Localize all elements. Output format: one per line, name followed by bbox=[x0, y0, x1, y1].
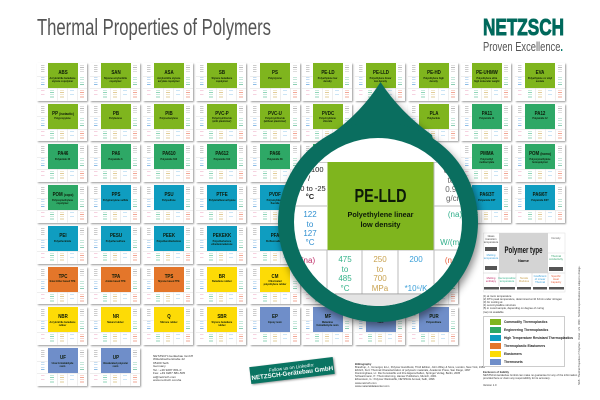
card: UF: Urea formaldehyde resin bbox=[52, 362, 73, 368]
card: PA610: PA610 bbox=[162, 151, 175, 157]
card: CM bbox=[250, 266, 300, 304]
card: PA66: Polyamide 66 bbox=[267, 158, 283, 161]
polymer type template card: Specific bbox=[551, 274, 561, 278]
magnified card: PE-LLD: (na) bbox=[445, 256, 459, 265]
magnified card: PE-LLD: 250 bbox=[373, 255, 387, 264]
card: PA6/6T: PA6/6T bbox=[533, 192, 547, 198]
polymer type template card: temperature bbox=[500, 279, 515, 283]
footnotes: (3) for cooling at bbox=[483, 301, 502, 304]
magnified card: PE-LLD: 0.94 bbox=[445, 185, 461, 194]
polymer type template card: conductivity bbox=[549, 257, 564, 261]
magnified card: PE-LLD: / bbox=[308, 174, 311, 183]
card: PUR bbox=[408, 307, 458, 345]
card: PA12: PA12 bbox=[535, 110, 545, 116]
polymer type template card: Melting bbox=[487, 276, 496, 280]
card: PP bbox=[37, 104, 87, 141]
card: TPC bbox=[37, 266, 87, 304]
card: ASA: ASA bbox=[164, 70, 173, 76]
card: UP: UP bbox=[112, 355, 119, 361]
card: UP bbox=[90, 348, 140, 386]
card: PE-LD: Polyethylene low density bbox=[318, 77, 337, 83]
contact address: Germany bbox=[153, 364, 166, 368]
card: PVC-U bbox=[250, 104, 300, 141]
card: NBR: Acrylonitrile butadiene rubber bbox=[50, 321, 75, 327]
card: TPA: TPA bbox=[111, 274, 120, 280]
card: SBR: SBR bbox=[217, 314, 227, 320]
magnifier ring with pointer bbox=[278, 82, 478, 322]
legend: elastomers: Elastomers bbox=[504, 352, 522, 356]
card: EP: EP bbox=[272, 314, 278, 320]
magnified card: PE-LLD: to bbox=[342, 265, 349, 274]
card: PVDC bbox=[302, 104, 352, 141]
LinkedIn badge: NETZSCH-Gerätebau GmbH bbox=[251, 364, 334, 381]
card: PVDC: PVDC bbox=[321, 110, 334, 116]
magnified card: PE-LLD: *10⁶/K bbox=[405, 284, 428, 293]
card: PF bbox=[355, 307, 405, 345]
card: Q bbox=[143, 307, 193, 345]
card: SB: Styrene butadiene copolymer bbox=[212, 77, 232, 83]
footnotes: (1) at room temperature bbox=[483, 294, 511, 298]
card: SAN: Styrene acrylonitrile copolymer bbox=[104, 77, 127, 83]
card: CM: CM bbox=[272, 274, 278, 280]
card: PLA: Polylactide bbox=[427, 117, 440, 120]
card: PA12: Polyamide 12 bbox=[532, 117, 548, 120]
card: PMMA bbox=[461, 144, 511, 182]
card: PIB: Polyisobutylene bbox=[160, 117, 178, 120]
card: PEI bbox=[37, 226, 87, 264]
card: PA6/3T bbox=[461, 185, 511, 222]
card: PS bbox=[250, 63, 300, 100]
card: EP: Epoxy resin bbox=[268, 321, 282, 324]
footnotes: (4) semicrystalline structure bbox=[483, 304, 516, 307]
card: PEI: PEI bbox=[59, 233, 66, 239]
card: TPC: TPC bbox=[58, 274, 67, 280]
card: PF: PF bbox=[378, 314, 383, 320]
magnified card: PE-LLD: (na) bbox=[448, 210, 462, 219]
card: NR: Natural rubber bbox=[107, 321, 124, 324]
card: PA612 bbox=[196, 144, 246, 182]
card: TPA: Amide based TPE bbox=[105, 280, 126, 283]
card: PA11: Polyamide 11 bbox=[479, 117, 494, 120]
card: PEEK: PEEK bbox=[163, 233, 175, 239]
polymer type template card: Polymer type bbox=[504, 245, 542, 256]
legend: elastomers thermoplastic: Thermoplastic Elastomers bbox=[504, 344, 545, 348]
polymer type template card: Capacity bbox=[551, 280, 562, 284]
card: PIB: PIB bbox=[165, 110, 172, 116]
magnified card: PE-LLD: 475 bbox=[338, 255, 352, 264]
bibliography bbox=[355, 363, 485, 388]
card: PP: Polypropylene bbox=[54, 117, 71, 120]
card: PMMA: Polymethyl methacrylate bbox=[479, 158, 494, 164]
card: PA610 bbox=[143, 144, 193, 182]
magnified card: PE-LLD: to bbox=[377, 265, 384, 274]
card: ASA: Acrylonitrile styrene acrylate copolymer bbox=[157, 77, 180, 83]
bibliography: Schwarzmann, P.: Thermoforming, Hanser Publishers, Munich, 2001 bbox=[355, 375, 436, 378]
card: NR bbox=[90, 307, 140, 345]
card: PEKEKK: PEKEKK bbox=[213, 233, 231, 239]
card: PE-LLD: PE-LLD bbox=[373, 70, 388, 76]
card: PA610: Polyamide 610 bbox=[160, 158, 177, 161]
card: PE-LLD bbox=[355, 63, 405, 100]
bibliography: Ehrlich, Kurt: Thermal Characterization of polymeric materials, Academic Press, San Diego, 1997 bbox=[355, 369, 470, 372]
polymer type template card: Density bbox=[552, 236, 561, 240]
card: PA66 bbox=[250, 144, 300, 182]
card: PA6: Polyamide 6 bbox=[109, 158, 122, 161]
card: UP: Unsaturated polyester resin bbox=[103, 362, 128, 368]
polymer type template card: Melting bbox=[487, 253, 496, 257]
card: EVA: EVA bbox=[536, 70, 544, 76]
LinkedIn badge bbox=[249, 356, 335, 384]
card: PA6/6T bbox=[514, 185, 564, 222]
card: PSU: Polysulfone bbox=[162, 199, 176, 202]
polymer type template card: Thermal bbox=[535, 280, 545, 284]
contact address: at@netzsch.com bbox=[153, 375, 176, 379]
legend: commodity: Commodity Thermoplastics bbox=[504, 320, 547, 324]
card: partly hidden rubber: Chloroprene rubber bbox=[316, 280, 339, 283]
card: partly hidden polymer bbox=[302, 144, 352, 182]
card: PVDC: Polyvinylidene chloride bbox=[319, 117, 336, 123]
polymer type template card: transition bbox=[486, 237, 497, 241]
bibliography: Ehrenstein, G.: Polymer Werkstoffe, NETZSCH Annual, Selb, 1996 bbox=[355, 378, 435, 381]
card: PFA: Perfluoroalkoxy bbox=[266, 240, 284, 243]
bibliography: Bibliography bbox=[355, 363, 371, 366]
magnified card: PE-LLD: Polyethylene linear bbox=[348, 210, 414, 219]
legend: thermosets bbox=[490, 359, 523, 365]
polymer type template card bbox=[483, 232, 566, 292]
polymer type template card: Thermal bbox=[551, 254, 561, 258]
card: TPS: TPS bbox=[164, 274, 173, 280]
card: PTFE: Polytetrafluoroethylene bbox=[209, 199, 236, 202]
card: PA46 bbox=[37, 144, 87, 182]
card: PB: PB bbox=[112, 110, 119, 116]
legend: engineering bbox=[490, 327, 548, 333]
card: partly hidden polymer: PBT bbox=[323, 151, 332, 157]
card: PFA: PFA bbox=[271, 233, 279, 239]
magnified card: PE-LLD: to bbox=[307, 220, 314, 229]
card: PS: PS bbox=[272, 70, 278, 76]
legend: engineering: Engineering Thermoplastics bbox=[504, 328, 548, 332]
footnotes: (na) not available bbox=[483, 311, 504, 314]
magnified card: PE-LLD: g/cm³ bbox=[446, 194, 466, 203]
card: ABS: Acrylonitrile butadiene styrene copolymer bbox=[50, 77, 75, 83]
polymer type template card: Name bbox=[518, 258, 530, 263]
card: TPA bbox=[90, 266, 140, 304]
card: PUR: Polyurethane bbox=[426, 321, 441, 324]
card: PA6/3T: PA6/3T bbox=[479, 192, 494, 198]
card: PVDF: PVDF bbox=[269, 192, 281, 198]
card: PSU bbox=[143, 185, 193, 222]
card: PEKEKK bbox=[196, 226, 246, 264]
card: PE-LLD: Polyethylene linear low density bbox=[370, 77, 391, 83]
card: PA46: Polyamide 46 bbox=[55, 158, 70, 161]
card: PE-UHMW bbox=[461, 63, 511, 100]
card: PTFE bbox=[196, 185, 246, 222]
card: PUR: PUR bbox=[429, 314, 438, 320]
polymer type template card: Decomposition bbox=[498, 276, 516, 280]
card: PE-HD bbox=[408, 63, 458, 100]
card: PVC-U: PVC-U bbox=[268, 110, 282, 116]
card: ABS bbox=[37, 63, 87, 100]
card: partly hidden rubber right bbox=[408, 266, 458, 304]
card: TPS bbox=[143, 266, 193, 304]
card: EP bbox=[250, 307, 300, 345]
card: EVA: Polyethylene co vinyl acetate bbox=[528, 77, 552, 83]
magnified card: PE-LLD: °C bbox=[341, 284, 350, 293]
card: CM: Chlorinated polyethylene rubber bbox=[264, 280, 286, 286]
card: SAN: SAN bbox=[111, 70, 120, 76]
contact address: NETZSCH-Gerätebau GmbH bbox=[153, 354, 193, 358]
card: TPC: Ester-Ether based TPE bbox=[50, 280, 75, 283]
card: partly hidden rubber: CR bbox=[324, 274, 331, 280]
contact address: Fax: +49 9287 881-505 bbox=[153, 371, 185, 375]
card: SBR: Styrene butadiene rubber bbox=[212, 321, 232, 327]
card: POM homo: POM (homo) bbox=[529, 151, 551, 157]
logo: NETZSCH Proven Excellence bbox=[483, 14, 564, 54]
legend: high temperature: High Temperature Resistant Thermoplastics bbox=[504, 336, 573, 340]
card: PE-LD bbox=[302, 63, 352, 100]
card: PE-UHMW: PE-UHMW bbox=[476, 70, 498, 76]
card: PA6/6T: Polyamide 6/6T bbox=[531, 199, 549, 202]
magnified card: PE-LLD: W/(m·K) bbox=[440, 238, 470, 247]
card: PE-HD: Polyethylene high density bbox=[423, 77, 444, 83]
card: PA612: PA612 bbox=[215, 151, 228, 157]
card: PA12 bbox=[514, 104, 564, 141]
card: PS: Polystyrene bbox=[268, 77, 282, 80]
polymer type template card: enthalpy bbox=[486, 279, 497, 283]
card: SB: SB bbox=[219, 70, 225, 76]
card: PF: resin bbox=[378, 321, 383, 324]
contact address: www.netzsch.com/ta bbox=[153, 378, 181, 382]
magnified card: PE-LLD: 127 bbox=[303, 229, 317, 238]
card: UF: UF bbox=[60, 355, 65, 361]
card: TPS: Styrene based TPE bbox=[158, 280, 180, 283]
card: PTFE: PTFE bbox=[216, 192, 228, 198]
card: partly hidden rubber right: Butyl rubber bbox=[427, 280, 441, 283]
footnotes: (2) DTG peak temperature, determined at 10 K/min under nitrogen bbox=[483, 298, 562, 301]
card: POM homo: Polyoxymethylene homopolymer bbox=[530, 158, 550, 164]
card: ASA bbox=[143, 63, 193, 100]
card: PB: Polybutene bbox=[109, 117, 122, 120]
disclaimer bbox=[483, 371, 578, 387]
card: partly hidden rubber bbox=[302, 266, 352, 304]
card: PVC-P: Polyvinylchloride (with plasticizer) bbox=[212, 117, 232, 123]
card: NBR bbox=[37, 307, 87, 345]
contact address: Wittelsbacherstraße 42 bbox=[153, 357, 185, 361]
card: PA11: PA11 bbox=[482, 110, 492, 116]
card: PVC-U: Polyvinylchloride (without plasticizer) bbox=[264, 117, 286, 123]
card: SAN bbox=[90, 63, 140, 100]
card: partly hidden rubber right: IIR bbox=[431, 274, 437, 280]
card: PA11 bbox=[461, 104, 511, 141]
card: PPS: Polyphenylene sulfide bbox=[103, 199, 128, 202]
bibliography: www.materialdatacenter.com bbox=[355, 385, 389, 388]
card: SB bbox=[196, 63, 246, 100]
card: PESU: PESU bbox=[109, 233, 122, 239]
card: ABS: ABS bbox=[58, 70, 67, 76]
card: BR bbox=[196, 266, 246, 304]
card: BR: BR bbox=[219, 274, 225, 280]
magnified card: PE-LLD: to bbox=[448, 176, 455, 185]
magnifier bbox=[274, 82, 486, 331]
card: PE-LD: PE-LD bbox=[321, 70, 334, 76]
card: Q: Silicone rubber bbox=[160, 321, 178, 324]
card: PEEK bbox=[143, 226, 193, 264]
magnified card: PE-LLD: 0. bbox=[444, 166, 450, 175]
footnotes bbox=[483, 294, 562, 314]
card: PA6: PA6 bbox=[111, 151, 120, 157]
card: BR: Butadiene rubber bbox=[212, 280, 232, 283]
bibliography: www.netzsch.com bbox=[355, 382, 377, 385]
polymer type template card: Tensile bbox=[520, 276, 529, 280]
magnified card: PE-LLD: 122 bbox=[303, 210, 317, 219]
magnified card: PE-LLD: 485 bbox=[338, 274, 352, 283]
polymer type template card: Glass bbox=[488, 234, 495, 238]
polymer type template card: Modulus bbox=[519, 279, 530, 283]
magnified card: PE-LLD bbox=[294, 138, 462, 306]
card: POM homo bbox=[514, 144, 564, 182]
card: partly hidden polymer: Polybutylene terephthalate bbox=[320, 158, 335, 164]
card: POM copo: Polyoxymethylene copolymer bbox=[52, 199, 73, 205]
card: PE-HD: PE-HD bbox=[427, 70, 441, 76]
LinkedIn badge: Follow us on LinkedIn: bbox=[269, 361, 315, 372]
magnified card: PE-LLD: MPa bbox=[372, 284, 389, 293]
card: PVC-P: PVC-P bbox=[215, 110, 229, 116]
legend: high temperature bbox=[490, 335, 573, 341]
magnified card: PE-LLD: 700 bbox=[373, 274, 387, 283]
card: PSU: PSU bbox=[164, 192, 173, 198]
legend: commodity bbox=[490, 319, 548, 325]
card: PLA: PLA bbox=[429, 110, 438, 116]
card: Q: Q bbox=[167, 314, 171, 320]
legend: elastomers bbox=[490, 351, 522, 357]
magnified card: PE-LLD: 200 bbox=[409, 255, 423, 264]
card: PVDF: Polyvinylidene fluoride bbox=[267, 199, 283, 205]
card: PVDF bbox=[250, 185, 300, 222]
polymer type template card: Coefficient bbox=[534, 274, 547, 278]
magnified card: PE-LLD: PE-LLD bbox=[354, 186, 406, 206]
magnified card: PE-LLD: -100 bbox=[308, 165, 324, 174]
card: PA6/3T: Polyamide 6/3T bbox=[478, 199, 496, 202]
card: PE-UHMW: Polyethylene ultra high molecular weight bbox=[474, 77, 499, 83]
magnified card: PE-LLD: 0 to -25 bbox=[300, 184, 326, 193]
card: POM copo bbox=[37, 185, 87, 222]
bibliography: Brandrup, J., Immergut, E.H., Polymer Handbook, Third Edition, John Wiley & Sons, London, New York, 1989 bbox=[355, 366, 485, 369]
disclaimer: NETZSCH-Gerätebau GmbH can make no guarantee for any of the information bbox=[483, 374, 577, 377]
card: POM copo: POM (copo) bbox=[52, 192, 73, 198]
magnified card: PE-LLD: °C bbox=[306, 192, 315, 201]
contact address: 95100 Selb bbox=[153, 361, 169, 365]
card: NBR: NBR bbox=[58, 314, 67, 320]
bibliography: Domininghaus, H.: Die Kunststoffe und ihre Eigenschaften, Springer Verlag, Berlin, 2005 bbox=[355, 372, 460, 375]
card: MF: Melamine formaldehyde resin bbox=[316, 321, 339, 327]
card: PIB bbox=[143, 104, 193, 141]
card: PESU bbox=[90, 226, 140, 264]
magnified card: PE-LLD: (na) bbox=[301, 256, 315, 265]
disclaimer: Exclusion of liability bbox=[483, 371, 509, 374]
footnotes: (5) in cured sample, depending on degree of curing bbox=[483, 307, 544, 310]
card: MF: MF bbox=[324, 314, 331, 320]
magnified card: PE-LLD: °C bbox=[306, 238, 315, 247]
card: PP: PP (isotactic) bbox=[52, 110, 73, 116]
card: PPS: PPS bbox=[111, 192, 120, 198]
polymer type template card: Heat bbox=[553, 277, 559, 281]
contact address bbox=[153, 354, 193, 382]
polymer type template card: temperature bbox=[484, 240, 499, 244]
card: PPS bbox=[90, 185, 140, 222]
disclaimer: Version 1.0 bbox=[483, 384, 496, 387]
card: PA46: PA46 bbox=[57, 151, 68, 157]
card: UF bbox=[37, 348, 87, 386]
contact address: Tel.: +49 9287 881-0 bbox=[153, 368, 181, 372]
card: PMMA: PMMA bbox=[480, 151, 494, 157]
polymer type template card: temperature bbox=[484, 256, 499, 260]
card: PVC-P bbox=[196, 104, 246, 141]
disclaimer: provided here or claim any responsibility for its accuracy. bbox=[483, 377, 550, 380]
card: PA6 bbox=[90, 144, 140, 182]
card: SBR bbox=[196, 307, 246, 345]
card: PLA bbox=[408, 104, 458, 141]
card: NR: NR bbox=[112, 314, 119, 320]
card: MF bbox=[302, 307, 352, 345]
card: PESU: Polyethersulfone bbox=[106, 240, 125, 243]
card: PA612: Polyamide 612 bbox=[214, 158, 230, 161]
polymer type template card: of Linear bbox=[535, 277, 545, 281]
legend: elastomers thermoplastic bbox=[490, 343, 546, 349]
vertical print note: NGB · Thermal Properties of Polymers · Poster · EN · 0820 · Technical specifications are subject to change. bbox=[578, 266, 581, 385]
card: PB bbox=[90, 104, 140, 141]
card: PEEK: Polyetheretherketone bbox=[157, 240, 181, 243]
card: PA66: PA66 bbox=[270, 151, 280, 157]
card: PEI: Polyetherimide bbox=[54, 240, 71, 243]
magnified card: PE-LLD: low density bbox=[360, 220, 401, 229]
card: PEKEKK: Polyetherketone etherketoneketone bbox=[211, 240, 233, 246]
card: PFA bbox=[250, 226, 300, 264]
legend: polymer classes bbox=[483, 316, 565, 366]
legend: thermosets: Thermosets bbox=[504, 360, 523, 364]
card: EVA bbox=[514, 63, 564, 100]
